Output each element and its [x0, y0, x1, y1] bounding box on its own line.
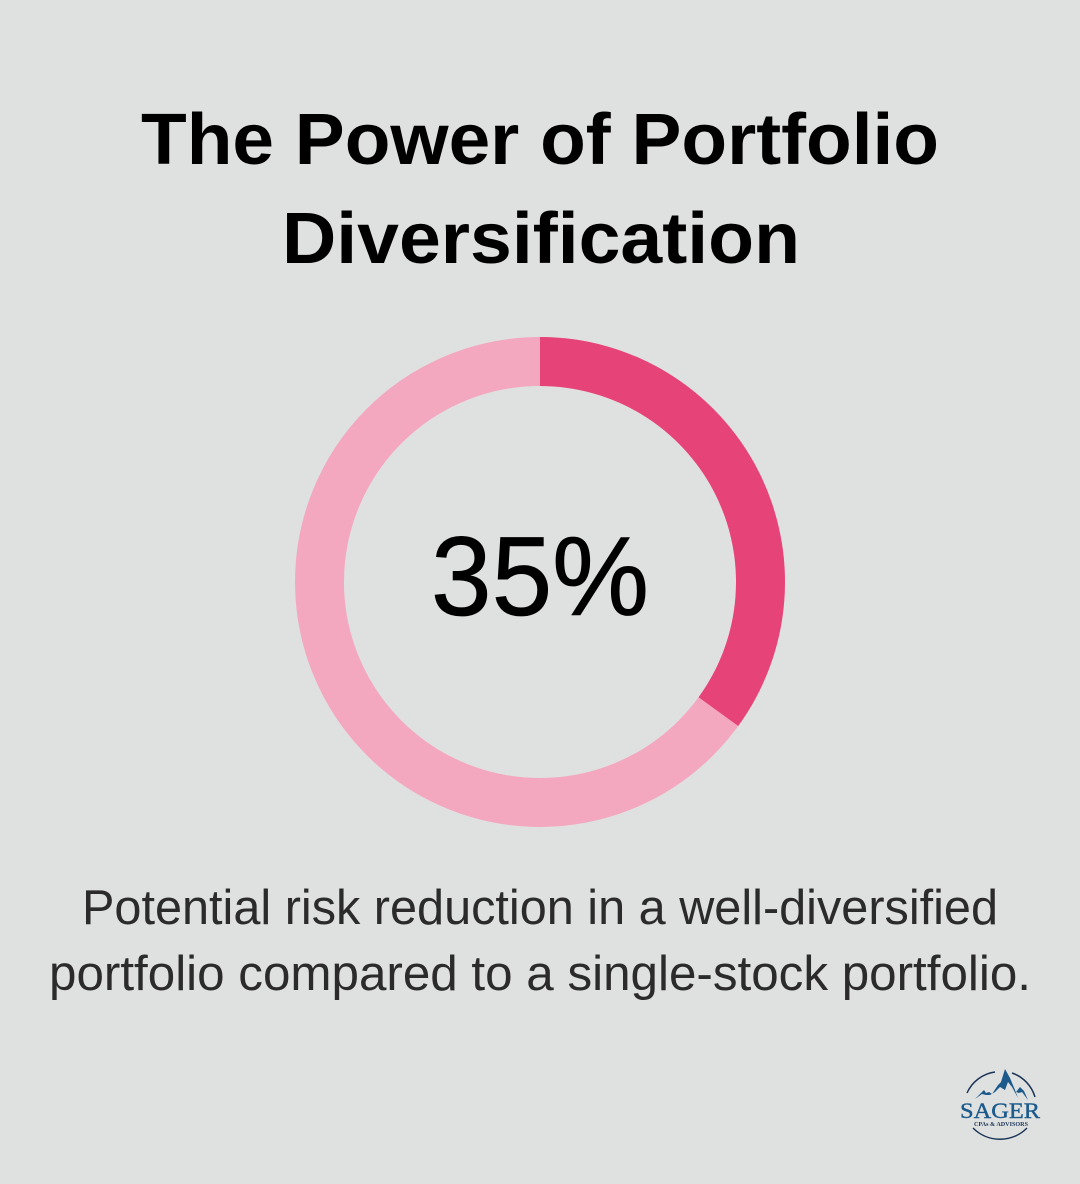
description text: [49, 881, 1031, 1001]
donut chart: 35%: [320, 337, 785, 802]
title: The Power of Portfolio: [141, 100, 939, 180]
description text: portfolio compared to a single-stock portfolio.: [49, 947, 1031, 1001]
logo mountains: [975, 1069, 1028, 1100]
logo: Sager CPAs & Advisors: [960, 1069, 1040, 1139]
logo ring: [967, 1072, 1035, 1139]
logo wordmark: SAGER: [960, 1098, 1040, 1123]
title: Diversification: [282, 199, 800, 279]
title: [141, 100, 939, 279]
donut value: 35%: [431, 514, 649, 639]
logo tagline: CPAs & ADVISORS: [974, 1122, 1029, 1128]
description text: Potential risk reduction in a well-diversified: [82, 881, 998, 935]
